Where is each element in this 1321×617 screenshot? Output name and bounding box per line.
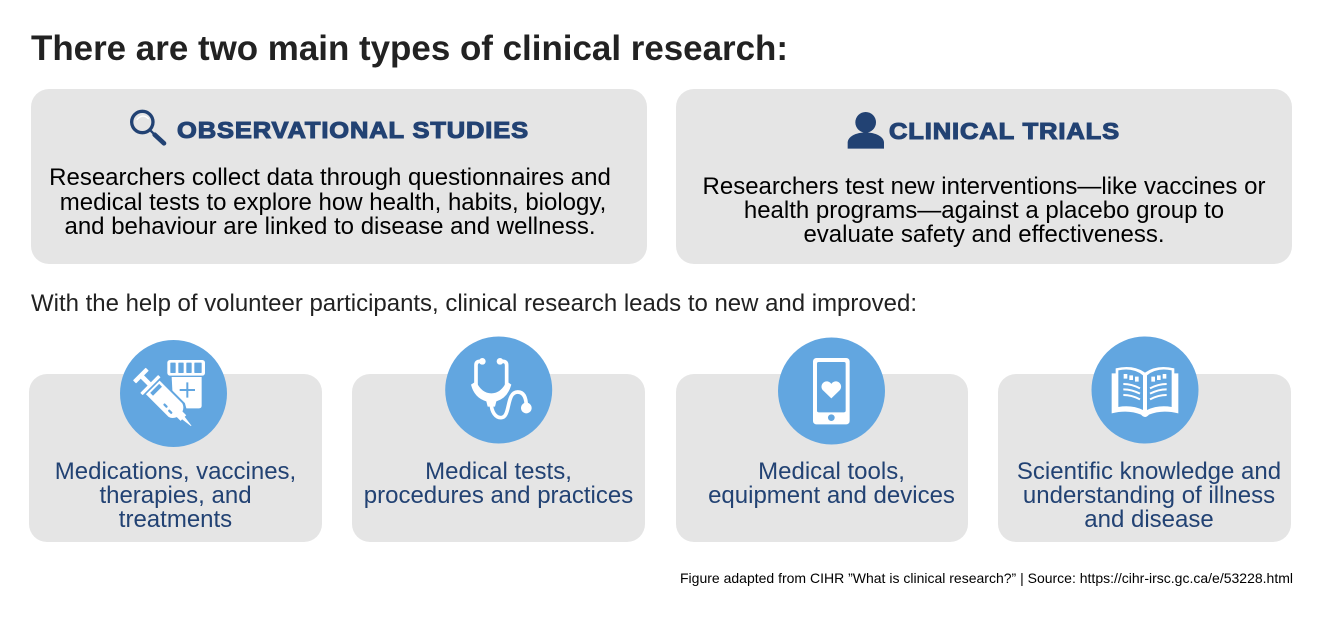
label: scientific knowledge: and disease (1084, 506, 1214, 533)
label: medications (55, 458, 296, 533)
label: medications: Medications, vaccines, (55, 458, 296, 485)
label: medical tests: Medical tests, (425, 458, 572, 485)
icon: open book (1092, 336, 1198, 444)
text: clinical trials description (703, 173, 1265, 248)
icon: person (848, 112, 884, 149)
label: scientific knowledge: Scientific knowledge and (1017, 458, 1281, 485)
text: clinical trials description: health programs—against a placebo group to (744, 197, 1224, 224)
panel: medical tests (352, 336, 645, 542)
label: medical tools: Medical tools, (758, 458, 905, 485)
text: observational description (49, 164, 611, 240)
label: medical tests (364, 458, 633, 509)
label: scientific knowledge (1017, 458, 1281, 533)
label: medications: therapies, and (99, 482, 252, 509)
title: There are two main types of clinical research: (31, 29, 788, 68)
label: medical tools (708, 458, 955, 509)
label: scientific knowledge: understanding of illness (1023, 482, 1275, 509)
panel: medical tools (676, 338, 968, 542)
label: medications: treatments (119, 506, 232, 533)
icon: stethoscope (445, 336, 552, 444)
icon: magnifying glass (132, 111, 164, 143)
icon: phone with heart (778, 338, 885, 444)
text: observational description: Researchers collect data through questionnaires and (49, 164, 611, 191)
panel: medications (29, 340, 322, 542)
heading: observational studies: OBSERVATIONAL STUDIES (177, 117, 529, 143)
text: clinical trials description: evaluate safety and effectiveness. (803, 221, 1165, 248)
panel: scientific knowledge (998, 336, 1291, 542)
panel: observational studies (31, 89, 647, 264)
text: clinical trials description: Researchers test new interventions—like vaccines or (703, 173, 1265, 200)
text: observational description: medical tests to explore how health, habits, biology, (60, 189, 606, 216)
heading: clinical trials: CLINICAL TRIALS (889, 118, 1120, 144)
label: medical tests: procedures and practices (364, 482, 633, 509)
source note: Figure adapted from CIHR ”What is clinical research?” | Source: https://cihr-irsc.gc.ca/e/53228.html (680, 570, 1293, 586)
label: medical tools: equipment and devices (708, 482, 955, 509)
text: observational description: and behaviour are linked to disease and wellness. (64, 213, 596, 240)
subheading: With the help of volunteer participants, clinical research leads to new and improved: (31, 290, 917, 317)
panel: clinical trials (676, 89, 1292, 264)
icon: syringe and pill bottle (120, 340, 227, 447)
